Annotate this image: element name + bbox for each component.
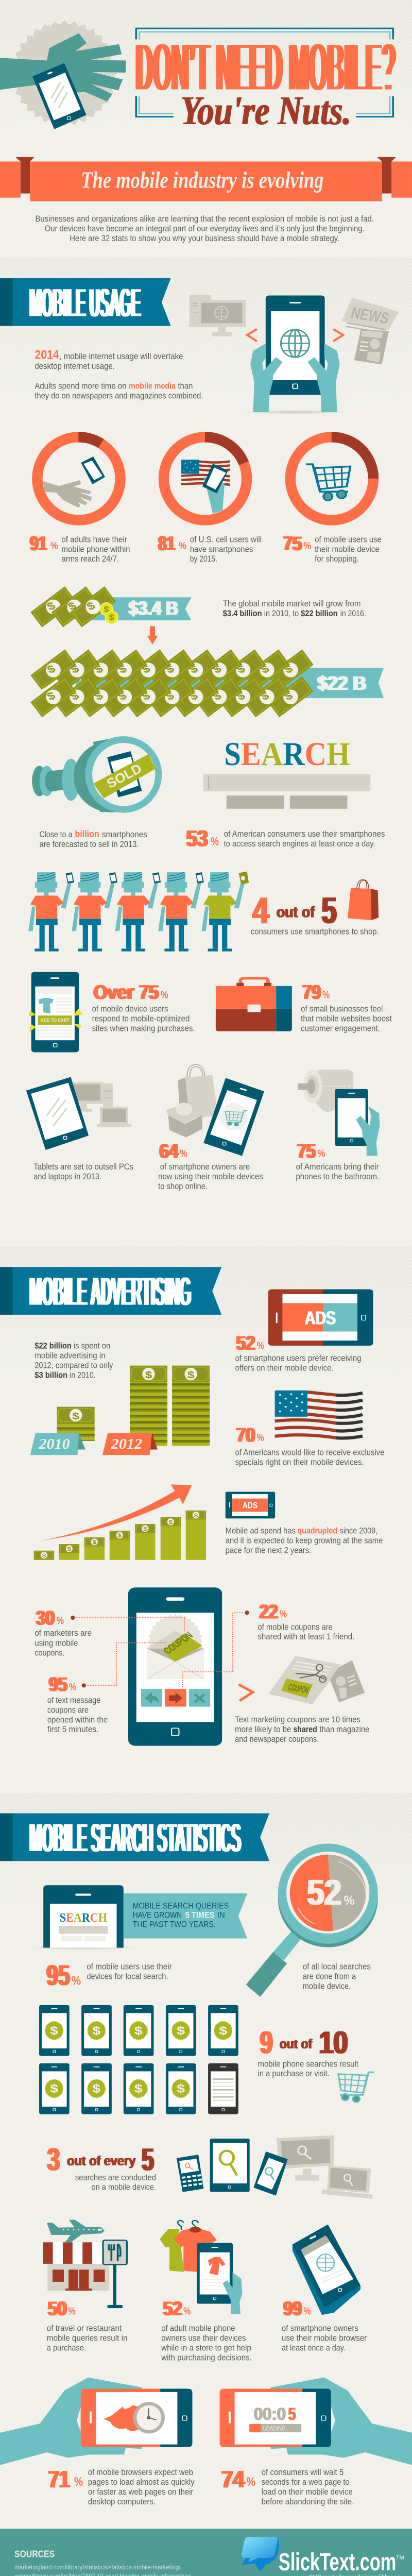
icon: ads phone: ADS [305,1308,336,1329]
stat: 75 percent bathroom: phones to the bathroom. [296,1172,379,1181]
stat: 91 percent [30,533,130,564]
icon: shopping bag [348,879,379,920]
ribbon: search queries grown: IN [217,1910,225,1920]
stat: 3 out of every 5: 5 [142,2142,154,2177]
stat: 50 percent [47,2298,127,2353]
stat: 50 percent: a purchase. [47,2343,86,2353]
sources list: marketingland.com/library/statistics/statistics-mobile-marketing/ [14,2564,181,2571]
ribbon: search queries grown [124,1893,247,1938]
text: global market growth: $22 billion [301,609,338,618]
chart: 9 of 10 phones: $$$$ [50,2083,185,2095]
stat: 75 percent bathroom: of Americans bring their [296,1162,379,1172]
text: all local searches: mobile device. [303,1981,351,1991]
stat: 30 percent marketers: 30 [36,1607,55,1629]
stat: 81 percent: 81 [158,533,175,555]
header section [0,20,412,326]
stat: 52 percent prefer offers: offers on their mobile device. [235,1363,333,1373]
stat: 2014 overtake: , mobile internet usage will overtake [59,352,183,362]
stat: 3 out of every 5: on a mobile device. [92,2183,156,2192]
icon: right hand with loading phone: 5 [288,2404,296,2424]
stat: 74 percent: before abandoning the site. [262,2497,354,2507]
stat: 79 percent: customer engagement. [301,1024,380,1033]
text: coupons ten times: and newspaper coupons. [235,1735,319,1744]
icon: briefcase [216,978,292,1031]
starburst behind hand [11,20,117,126]
stat: 9 out of 10: out of [280,2037,312,2052]
stat: over 75 percent: sites when making purchases. [92,1024,195,1033]
sold label on stamp: SOLD [104,760,144,791]
stat: 64 percent: 64 [160,1140,179,1162]
donut: 91 percent [37,437,121,520]
stat: 64 percent: % [180,1147,187,1159]
stat: 64 percent: now using their mobile devices [158,1172,263,1181]
stat: 81 percent: by 2015. [190,554,217,564]
stat: 64 percent: of smartphone owners are [160,1162,250,1172]
icon: coupon phone [128,1587,222,1746]
stat: 3 out of every 5: 3 [47,2142,60,2177]
text: coupons ten times: than magazine [319,1725,369,1734]
icon: hands holding phone with globe [238,295,352,414]
icon: grid of dollar bills: $$$$$$$$$$$ [45,689,295,703]
stat: 79 percent: 79 [302,981,321,1004]
stat: 91 percent: arms reach 24/7. [61,554,119,564]
stat: 81 percent: % [179,540,186,552]
stat: 95 percent opened: coupons are [47,1705,89,1715]
stat: 71 percent: of mobile browsers expect web [88,2468,193,2478]
stat: 75 percent: their mobile device [315,545,380,554]
stat: adults mobile media: than [178,382,193,391]
ribbon: search queries grown: THE PAST TWO YEARS. [133,1920,216,1929]
stat: adults mobile media: they do on newspapers and magazines combined. [35,391,203,401]
icon: plane and restaurant [43,2220,127,2308]
ribbon: search queries grown: 5 TIMES [185,1910,215,1920]
chart: magnifier 52 percent [246,1843,378,1997]
stat: billion smartphones [40,828,147,850]
stat: billion smartphones: smartphones [102,830,147,839]
stat: 95 percent local search: % [72,1973,81,1988]
stat: 52 percent in store: owners use their devices [161,2333,246,2343]
stat: 81 percent [158,533,262,564]
stat: 91 percent: 91 [30,533,47,555]
stat: billion smartphones: Close to a [40,830,73,839]
dotted connector lines [71,1611,249,1688]
stat: billion smartphones: are forecasted to sell in 2013. [40,840,139,850]
stat: 74 percent: load on their mobile device [262,2487,353,2497]
stat: 71 percent [48,2466,195,2507]
stat: 74 percent: of consumers will wait 5 [262,2468,344,2478]
text: 22 billion spent: $22 billion [35,1341,72,1351]
icon: three dollar bills [30,586,116,628]
icon: american flag [275,1391,363,1438]
icon: coins [100,603,118,623]
stat: 52 percent prefer offers: % [256,1340,264,1351]
section: purchases and devices [0,972,392,1315]
stat: 2014 overtake: 2014 [35,348,59,362]
chart: cash stacks 2010 vs 2012 [30,1366,210,1455]
stat: 52 percent prefer offers: of smartphone users prefer receiving [235,1354,362,1363]
stat: 30 percent marketers [35,1607,92,1658]
section: mobile advertising [30,1289,384,1658]
stat: 70 percent: 70 [236,1424,255,1446]
banner: mobile search statistics [0,1814,269,1861]
stat: 30 percent marketers: using mobile [35,1638,78,1648]
stat: 79 percent: % [322,989,330,1001]
text: ad spend quadrupled: quadrupled [298,1526,337,1536]
icon: small ads phone: ADS [243,1500,258,1511]
banner: mobile usage [0,278,171,326]
icon: greater than [238,1684,253,1701]
icon: ads phone [268,1289,373,1346]
icon: tilted phone with globe [293,2225,360,2315]
text: 22 billion spent: 2012, compared to only [35,1361,113,1370]
stat: 81 percent: of U.S. cell users will [190,535,262,545]
stat: 53 percent: % [211,835,219,848]
icon: newspaper coupon and scissors [268,1656,365,1704]
stat: 91 percent: % [50,540,58,552]
stat: 52 percent in store: of adult mobile phone [161,2324,235,2333]
stat: 4 out of 5 [251,890,379,937]
stat: over 75 percent: respond to mobile-optimized [92,1014,190,1024]
stat: adults mobile media: mobile media [129,382,176,391]
text: 22 billion spent: is spent on [74,1341,110,1351]
stat: 22 percent shared: of mobile coupons are [258,1622,333,1632]
stat: 74 percent: 74 [221,2466,245,2493]
icon: right hand with loading phone: 00:0 [254,2404,286,2424]
stat: 95 percent opened: 95 [49,1673,67,1696]
stat: 52 percent prefer offers: 52 [236,1332,255,1354]
text: tablets [33,1162,133,1181]
text: coupons ten times [235,1715,369,1744]
intro text [35,214,374,244]
stat: 95 percent opened: opened within the [47,1715,108,1725]
stat: 30 percent marketers: % [57,1614,64,1626]
ribbon: the mobile industry is evolving [0,157,412,201]
stat: billion smartphones: billion [75,828,99,839]
chart: cash stacks 2010 vs 2012: 2012 [111,1435,142,1452]
stat: 2014 overtake [35,348,183,371]
stat: 70 percent: % [256,1431,264,1443]
icon: grid of dollar bills: $$$$$$$$$$$ [45,663,295,675]
icon: phone with add to cart: ADD TO CART [41,1017,70,1024]
stat: 4 out of 5: out of [277,904,315,921]
stat: 95 percent local search [46,1960,172,1991]
stat: 75 percent bathroom: % [317,1147,325,1159]
section: money and search [28,649,385,952]
stat: 52 percent prefer offers [235,1332,362,1373]
stat: 52 percent in store: while in a store to get help [161,2343,251,2353]
text: global market growth: in 2010, to [264,609,299,618]
stat: 71 percent: or faster as web pages on their [88,2487,194,2497]
footer panel [0,2529,412,2576]
people illustration [28,871,249,952]
chart: 9 of 10 phones [39,2005,238,2114]
stat: 91 percent: of adults have their [61,535,127,545]
stat: 74 percent: % [247,2475,255,2488]
stat: 30 percent marketers: coupons. [35,1648,65,1658]
icon: bag, gift and phone [166,1064,264,1155]
stat: 50 percent: % [68,2305,76,2317]
text: all local searches [303,1962,371,1991]
stat: 99 percent: use their mobile browser [282,2333,367,2343]
stat: 79 percent [301,981,392,1033]
text: tablets: and laptops in 2013. [33,1172,101,1181]
stat: over 75 percent: Over 75 [94,981,159,1004]
stat: 2014 overtake: desktop internet usage. [35,362,115,371]
icon: search phone: SEARCH [60,1910,108,1924]
icon: hand holding phone [0,33,126,128]
stat: 99 percent: of smartphone owners [282,2324,358,2333]
icon: device family [177,2136,372,2199]
stat: 75 percent bathroom: 75 [297,1140,316,1162]
stat: 99 percent: 99 [283,2298,302,2320]
icon: coins: $$ [104,605,114,622]
chart: magnifier 52 percent: % [344,1893,355,1908]
chart: cash stacks 2010 vs 2012: 2010 [39,1435,70,1452]
stat: 3 out of every 5 [47,2142,156,2192]
icon: search phone [25,1885,141,1950]
search mock-up: SEARCH [224,735,350,772]
stat: 75 percent: 75 [283,533,302,555]
title block and illustration [0,27,412,326]
icon: newspaper: NEWS [349,304,391,328]
stat: 9 out of 10: 9 [260,2025,273,2060]
icon: coupon phone: COUPON [161,1630,196,1656]
stat: 9 out of 10: mobile phone searches result [258,2059,358,2069]
icon: sold stamp [32,736,162,813]
icon: three dollar bills: $$$ [45,599,97,613]
text: coupons ten times: Text marketing coupons are 10 times [235,1715,360,1724]
text: ad spend quadrupled: pace for the next 2 years. [226,1546,311,1555]
stat: 52 percent in store: 52 [163,2298,182,2320]
stat: 22 percent shared: % [280,1608,287,1620]
title frame [136,28,393,117]
stat: 95 percent opened: % [69,1681,76,1692]
stat: 71 percent: % [74,2475,83,2488]
stat: 95 percent local search: of mobile users use their [87,1962,172,1972]
icon: left hand with clock phone [0,2378,192,2465]
ribbon: 22 billion [76,668,384,698]
stat: 3 out of every 5: out of every [67,2154,136,2168]
chart: 9 of 10 phones: $$$$$ [50,2025,228,2038]
stat: over 75 percent: % [161,989,168,1001]
icon: phone with add to cart [28,972,83,1052]
stat: 53 percent: 53 [186,825,208,851]
ribbon: 22 billion: $22 B [317,673,366,694]
icon: newspaper coupon and scissors: COUPON [287,1682,310,1696]
stat: 79 percent: of small businesses feel [301,1005,383,1014]
stat: 64 percent: to shop online. [158,1182,208,1191]
text: 22 billion spent: in 2010. [70,1370,96,1380]
icon: toilet roll and phone [298,1070,380,1156]
section: coupons and search [0,1587,378,1997]
stat: 9 out of 10 [258,2025,358,2079]
text: global market growth: in 2016. [340,609,366,618]
stat: 53 percent [186,825,385,851]
arrow: down [147,626,158,645]
ribbon: 3.4 billion: $3.4 B [129,598,178,619]
chart: magnifier 52 percent: 52 [307,1872,341,1912]
stat: 75 percent bathroom [296,1140,379,1181]
text: coupons ten times: shared [293,1725,317,1734]
stat: 70 percent: specials right on their mobile devices. [235,1458,364,1467]
stat: 75 percent [283,533,382,564]
text: 22 billion spent [35,1341,113,1380]
text: 22 billion spent: $3 billion [35,1370,67,1380]
stat: 4 out of 5: 5 [321,890,337,931]
stat: 9 out of 10: 10 [319,2025,348,2060]
stat: 71 percent: desktop computers. [88,2497,156,2507]
logo: slicktext [242,2537,404,2576]
stat: 75 percent: of mobile users use [315,535,382,545]
text: coupons ten times: more likely to be [235,1725,291,1734]
ribbon: search queries grown: MOBILE SEARCH QUERIES [133,1901,229,1911]
stat: over 75 percent: of mobile device users [92,1005,168,1014]
text: all local searches: are done from a [303,1972,356,1981]
icon: small ads phone [226,1492,275,1518]
ribbon: 3.4 billion [92,597,191,620]
stat: 71 percent: pages to load almost as quickly [88,2478,195,2487]
icon: grid of dollar bills [30,649,314,717]
icon: newspaper [341,298,399,364]
stat: 52 percent in store [161,2298,252,2363]
icon: right hand with loading phone [220,2378,412,2465]
text: all local searches: of all local searches [303,1962,371,1972]
stat: 75 percent: % [303,540,312,552]
donut charts [37,437,373,520]
icon: flag and phone in hand [181,460,230,514]
icon: teal cart [338,2072,374,2102]
stat: 74 percent [221,2466,354,2507]
icon: desktop computer [190,295,246,336]
stat: 52 percent in store: % [183,2305,191,2317]
stat: adults mobile media: Adults spend more time on [35,382,126,391]
stat: 99 percent: at least once a day. [282,2343,346,2353]
text: ad spend quadrupled [226,1526,383,1555]
stat: over 75 percent [92,981,195,1033]
stat: 22 percent shared [258,1601,354,1642]
stat: 22 percent shared: 22 [260,1601,278,1623]
stat: 95 percent opened: first 5 minutes. [47,1725,98,1734]
stat: 52 percent in store: with purchasing decisions. [161,2353,252,2363]
text: global market growth: The global mobile market will grow from [223,599,361,608]
section: mobile usage [35,295,399,414]
section: final stats [0,2298,412,2576]
stat: 91 percent: mobile phone within [61,545,130,554]
section: search statistics [39,2005,374,2315]
donut: 75 percent [290,437,373,520]
text: 22 billion spent: mobile advertising in [35,1351,106,1361]
stat: 30 percent marketers: of marketers are [35,1629,92,1638]
donut: 81 percent [164,437,247,520]
sources list [14,2564,376,2576]
stat: 71 percent: 71 [48,2466,70,2493]
stat: 9 out of 10: in a purchase or visit. [258,2069,330,2079]
stat: 70 percent [235,1424,384,1467]
stat: 4 out of 5: 4 [252,890,269,931]
logo: slicktext: TM [396,2554,404,2561]
stat: 50 percent: of travel or restaurant [47,2324,122,2333]
stat: adults mobile media [35,382,203,401]
stat: 50 percent: 50 [48,2298,67,2320]
text: ad spend quadrupled: Mobile ad spend has [226,1526,296,1536]
chart: cash stacks 2010 vs 2012: $$$ [72,1369,195,1422]
stat: 95 percent local search: devices for local search. [87,1972,168,1981]
stat: 3 out of every 5: searches are conducted [75,2173,156,2182]
stat: 99 percent: % [303,2305,311,2317]
icon: shirts and phone [160,2221,242,2314]
text: global market growth: $3.4 billion [223,609,262,618]
stat: 99 percent [282,2298,367,2353]
arrow: growth [41,1484,192,1541]
stat: 64 percent [158,1140,263,1191]
stat: 50 percent: mobile queries result in [47,2333,127,2343]
text: global market growth [223,599,366,618]
icon: tablet and pcs [27,1077,131,1149]
ribbon: search queries grown: HAVE GROWN [133,1910,182,1920]
icon: shopping cart [306,464,350,500]
stats and icons row [30,456,382,645]
chart: growing bars: $$$$$$$ [42,1512,198,1559]
text: ad spend quadrupled: since 2009, [340,1526,377,1536]
stat: 75 percent: for shopping. [315,554,359,564]
text: tablets: Tablets are set to outsell PCs [33,1162,133,1172]
banner: mobile advertising [0,1267,221,1315]
arrows either side of phone [247,329,343,341]
stat: 95 percent local search: 95 [46,1960,70,1991]
search mock-up [203,735,370,809]
stat: 95 percent opened: of text message [47,1696,100,1705]
stat: 22 percent shared: shared with at least 1 friend. [258,1632,354,1642]
stat: 95 percent opened [47,1673,108,1734]
icon: reaching hand and phone [43,456,105,508]
stat: 74 percent: seconds for a web page to [262,2478,350,2487]
stat: 81 percent: have smartphones [190,545,253,554]
heading: sources: SOURCES [14,2549,55,2560]
icon: right hand with loading phone: LOADING... [263,2425,290,2432]
